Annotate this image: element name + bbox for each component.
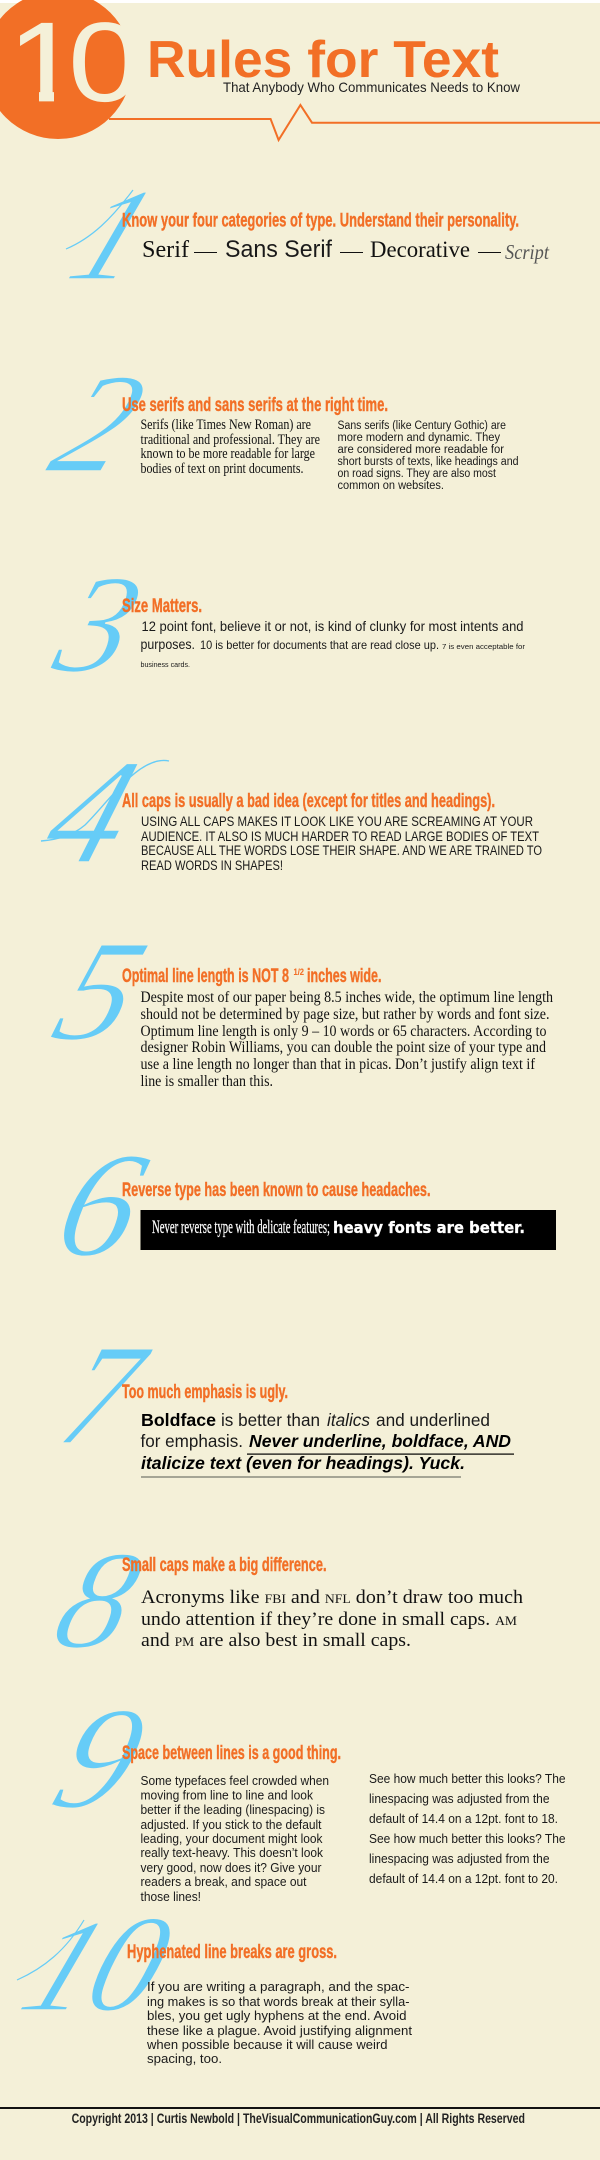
spaced leading paragraph: See how much better this looks? The <box>369 1771 566 1786</box>
type category samples <box>142 236 550 264</box>
size paragraph: 10 is better for documents that are read close up. <box>200 638 439 652</box>
crowded leading paragraph: leading, your document might look <box>140 1831 323 1846</box>
emphasis paragraph: italics <box>327 1410 370 1430</box>
heading 5: 1/2 <box>294 967 304 977</box>
rule 3 <box>38 547 526 702</box>
spaced leading paragraph <box>369 1771 566 1886</box>
sans serif paragraph: Sans serifs (like Century Gothic) are <box>338 420 506 432</box>
numeral 8: 8 <box>38 1523 158 1678</box>
hyphenation paragraph: bles, you get ugly hyphens at the end. Avoid <box>147 2009 407 2023</box>
hyphenation paragraph: ing makes is so that words break at their sylla- <box>147 1995 410 2009</box>
size paragraph: 7 is even acceptable for <box>442 642 526 651</box>
title: Rules for Text <box>147 31 499 89</box>
numeral 10: 0 <box>70 1887 189 2040</box>
line length paragraph: should not be determined by page size, but rather by words and font size. <box>140 1006 550 1023</box>
line length paragraph: line is smaller than this. <box>140 1073 273 1090</box>
rule 5 <box>35 912 553 1090</box>
line length paragraph: use a line length no longer than that in picas. Don’t justify align text if <box>140 1056 536 1073</box>
crowded leading paragraph: those lines! <box>140 1889 201 1904</box>
emphasis paragraph: for emphasis. <box>140 1431 243 1451</box>
heading 10: Hyphenated line breaks are gross. <box>127 1941 337 1963</box>
rule 2 <box>32 344 518 502</box>
spaced leading paragraph: default of 14.4 on a 12pt. font to 20. <box>369 1871 558 1886</box>
hyphenation paragraph: these like a plague. Avoid justifying alignment <box>147 2024 413 2038</box>
serif paragraph <box>140 417 320 477</box>
numeral 10: 1 <box>3 1893 128 2039</box>
type category samples: Decorative <box>370 237 470 262</box>
sans serif paragraph: short bursts of texts, like headings and <box>338 456 518 468</box>
serif paragraph: bodies of text on print documents. <box>140 461 304 477</box>
size paragraph: 12 point font, believe it or not, is kind of clunky for most intents and <box>142 618 524 634</box>
reverse type box: heavy fonts are better. <box>333 1218 525 1237</box>
serif paragraph: traditional and professional. They are <box>140 432 320 448</box>
reverse type box: Never reverse type with delicate features; <box>152 1217 330 1238</box>
numeral 1: 1 <box>51 162 176 308</box>
heading 3: Size Matters. <box>122 595 202 617</box>
small caps paragraph: undo attention if they’re done in small caps. am <box>141 1609 517 1630</box>
heading 2: Use serifs and sans serifs at the right time. <box>122 394 388 416</box>
sans serif paragraph: common on websites. <box>338 480 444 492</box>
size paragraph <box>140 618 526 669</box>
all caps paragraph: USING ALL CAPS MAKES IT LOOK LIKE YOU ARE SCREAMING AT YOUR <box>141 814 533 829</box>
sans serif paragraph: more modern and dynamic. They <box>338 432 500 444</box>
size paragraph: purposes. <box>140 636 195 652</box>
numeral 6: 6 <box>40 1123 163 1288</box>
crowded leading paragraph <box>140 1773 329 1904</box>
sans serif paragraph <box>338 420 518 492</box>
numeral 4: 4 <box>27 729 156 895</box>
reverse type box <box>140 1210 556 1250</box>
line length paragraph: Despite most of our paper being 8.5 inches wide, the optimum line length <box>140 989 553 1006</box>
line length paragraph: designer Robin Williams, you can double the point size of your type and <box>140 1039 546 1056</box>
crowded leading paragraph: readers a break, and space out <box>140 1874 307 1889</box>
spaced leading paragraph: linespacing was adjusted from the <box>369 1791 550 1806</box>
emphasis paragraph: is better than <box>221 1410 320 1430</box>
crowded leading paragraph: very good, now does it? Give your <box>140 1860 322 1875</box>
crowded leading paragraph: adjusted. If you stick to the default <box>140 1817 322 1832</box>
heading 5: Optimal line length is NOT 8 <box>122 965 289 987</box>
rule 1 <box>51 162 550 308</box>
small caps paragraph: Acronyms like fbi and nfl don’t draw too much <box>141 1587 524 1608</box>
all caps paragraph: READ WORDS IN SHAPES! <box>141 858 283 873</box>
heading 5: inches wide. <box>307 965 382 987</box>
rule 4 <box>27 729 542 895</box>
hyphenation paragraph: when possible because it will cause weird <box>146 2038 388 2052</box>
spaced leading paragraph: default of 14.4 on a 12pt. font to 18. <box>369 1811 558 1826</box>
numeral 3: 3 <box>38 547 159 702</box>
spaced leading paragraph: linespacing was adjusted from the <box>369 1851 550 1866</box>
spaced leading paragraph: See how much better this looks? The <box>369 1831 566 1846</box>
rule 9 <box>34 1677 565 1904</box>
heading 8: Small caps make a big difference. <box>122 1554 326 1576</box>
small caps paragraph <box>141 1587 524 1651</box>
crowded leading paragraph: Some typefaces feel crowded when <box>140 1773 329 1788</box>
rule 7 <box>44 1315 514 1478</box>
crowded leading paragraph: better if the leading (linespacing) is <box>140 1802 325 1817</box>
header pulse line <box>109 105 600 140</box>
sans serif paragraph: on road signs. They are also most <box>338 468 497 480</box>
rule 10 <box>3 1887 413 2066</box>
serif paragraph: Serifs (like Times New Roman) are <box>140 417 311 433</box>
type category samples: Script <box>505 240 550 264</box>
icon: orange circle with big 10 <box>0 0 126 139</box>
heading 9: Space between lines is a good thing. <box>122 1742 341 1764</box>
all caps paragraph <box>141 814 542 873</box>
sans serif paragraph: are considered more readable for <box>338 444 504 456</box>
icon: orange circle with big 10: 0 <box>68 0 142 126</box>
numeral 9: 9 <box>34 1677 166 1839</box>
size paragraph: business cards. <box>140 660 190 669</box>
type category samples: Sans Serif <box>225 236 332 263</box>
serif paragraph: known to be more readable for large <box>140 446 315 462</box>
line length paragraph <box>140 989 553 1090</box>
line length paragraph: Optimum line length is only 9 – 10 words or 65 characters. According to <box>140 1023 547 1040</box>
crowded leading paragraph: moving from line to line and look <box>140 1788 313 1802</box>
numeral 10 <box>3 1887 189 2040</box>
emphasis paragraph: italicize text (even for headings). Yuck. <box>141 1453 465 1473</box>
rule 6 <box>40 1123 556 1288</box>
emphasis paragraph: and underlined <box>376 1410 490 1430</box>
subtitle: That Anybody Who Communicates Needs to Know <box>223 79 521 95</box>
icon: orange circle with big 10: 1 <box>8 0 80 125</box>
heading 7: Too much emphasis is ugly. <box>122 1381 288 1403</box>
numeral 7: 7 <box>44 1315 165 1475</box>
numeral 5: 5 <box>35 912 165 1071</box>
emphasis paragraph: Never underline, boldface, AND <box>249 1431 511 1451</box>
header <box>0 0 600 140</box>
hyphenation paragraph <box>146 1980 413 2066</box>
heading 6: Reverse type has been known to cause headaches. <box>122 1179 430 1201</box>
hyphenation paragraph: If you are writing a paragraph, and the spac- <box>147 1980 410 1994</box>
crowded leading paragraph: really text-heavy. This doesn’t look <box>140 1845 323 1860</box>
type category samples: Serif <box>142 237 189 263</box>
rule 8 <box>38 1523 524 1678</box>
emphasis paragraph: Boldface <box>141 1410 216 1430</box>
emphasis paragraph <box>140 1410 514 1478</box>
small caps paragraph: and pm are also best in small caps. <box>141 1630 411 1651</box>
numeral 2: 2 <box>32 344 166 502</box>
hyphenation paragraph: spacing, too. <box>147 2052 222 2066</box>
